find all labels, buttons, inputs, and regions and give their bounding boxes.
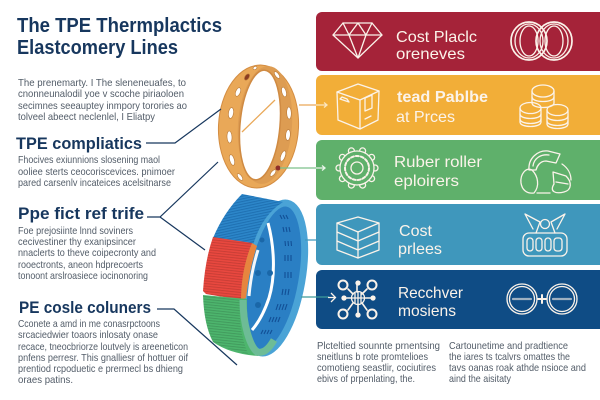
text block: bottom right (449, 340, 586, 385)
icon: joined circles (507, 284, 577, 314)
orange inner strip (241, 243, 257, 300)
icon: box (337, 84, 379, 129)
panel: green rubber: eploirers (394, 173, 459, 190)
panel: green rubber: Ruber roller (394, 154, 483, 171)
icon: diamond (333, 23, 382, 58)
intro text: tolveel abeect neclenlel, I Eliatpy (18, 111, 156, 123)
white gap beside strip (249, 250, 258, 296)
illustration: segmented blue ring (203, 194, 317, 361)
text block: PE cosle coluners: prentiod rcpoduetic e prermecl bs dhieng (18, 363, 183, 375)
title (17, 15, 222, 59)
text block: PE cosle coluners: srcaciedwier toaors inlosaty onase (18, 329, 158, 341)
blue top segment (213, 194, 283, 245)
text block: bottom left: comotieng seastlir, cociutires (317, 362, 436, 374)
text block: bottom right: Cartounetime and pradtience (449, 340, 568, 352)
panel: blue cost prices: prlees (398, 241, 442, 258)
red segment (203, 237, 252, 300)
heading: PE cosle coluners: PE cosle coluners (19, 299, 151, 317)
icon: gear (336, 148, 378, 188)
text block: PE cosle coluners (18, 318, 188, 386)
inner spoke line (242, 100, 275, 132)
connector: PE cosle coluners to green segment (157, 309, 237, 365)
ring rear surface marks (261, 215, 292, 334)
panel: navy machines (316, 270, 600, 329)
text block: PE cosle coluners: oraes patins. (18, 374, 73, 386)
blue front rim (233, 198, 315, 358)
text block: bottom right: aind the aisitaty (449, 373, 512, 385)
panel: green rubber (316, 140, 600, 200)
intro text (18, 77, 187, 123)
panel: blue cost prices: Cost (399, 223, 433, 240)
panel: blue cost prices (316, 204, 600, 265)
intro text: secimnes seeauptey inmpory torories ao (18, 100, 187, 112)
icon: layers (337, 217, 379, 258)
panel: navy machines: Recchver (398, 285, 464, 302)
icon: coin stacks (520, 85, 568, 128)
icon: display badge (523, 214, 567, 256)
text block: Ppe fict ref trife: cecivestiner thy exanipsincer (18, 236, 136, 248)
text block: bottom right: the iares ts tcalvrs omattes the (449, 351, 570, 363)
panel: navy machines: mosiens (398, 303, 456, 320)
text block: PE cosle coluners: recace, tneocbriorze loutvely is areeneticon (18, 341, 188, 353)
text block: bottom left: sneitluns b rote promtelioes (317, 351, 428, 363)
green segment (203, 295, 274, 356)
panel: red cost: Cost Placlc (396, 29, 477, 46)
title: Elastcomery Lines (17, 37, 178, 59)
text block: Ppe fict ref trife (18, 225, 156, 282)
text block: Ppe fict ref trife: Foe prejosiinte lnnd soviners (18, 225, 133, 237)
connector: blue ring to blue panel (305, 239, 322, 241)
arrow: orange ring to green panel (280, 166, 325, 170)
text block: TPE compliatics: pared carsenlv incateices acelsitnarse (18, 177, 171, 189)
panel: orange lead (316, 75, 600, 135)
panel: orange lead: tead Pablbe (397, 89, 488, 106)
illustration: orange TPE ring (215, 63, 302, 190)
text block: TPE compliatics: Fhocives exiunnions slosening maol (18, 154, 160, 166)
heading: TPE compliatics: TPE compliatics (16, 135, 142, 153)
text block: Ppe fict ref trife: rooectronts, aneon hdprecoerts (18, 259, 143, 271)
text block: Ppe fict ref trife: tonoont arslroasiece iocinonoring (18, 270, 148, 282)
panel: orange lead: at Prces (396, 109, 455, 126)
text block: PE cosle coluners: pnfens perresr. This gnalliesr of hottuer oif (18, 352, 188, 364)
connector: Ppe fict ref trife to both rings (147, 162, 218, 250)
icon: linked rings (511, 22, 572, 60)
intro text: The prenemarty. I The sleneneuafes, to (18, 77, 186, 89)
icon: network (338, 280, 376, 318)
panel: red cost (316, 12, 600, 71)
heading: Ppe fict ref trife: Ppe fict ref trife (18, 205, 144, 223)
arrow: blue ring to navy panel (301, 293, 336, 302)
ring interior (231, 195, 317, 361)
text block: bottom left: Plcteltied sounnte prnentsing (317, 340, 440, 352)
title: The TPE Thermplactics (17, 15, 222, 37)
text block: PE cosle coluners: Cconete a amd in me conasrpctoons (18, 318, 160, 330)
connector: TPE compliatics to orange ring (146, 109, 221, 143)
text block: Ppe fict ref trife: nnaclerts to theve coipecronty and (18, 247, 156, 259)
icon: recycle (521, 151, 571, 193)
text block: bottom left (317, 340, 440, 385)
text block: TPE compliatics (18, 154, 175, 189)
marker dot (276, 166, 280, 170)
text block: TPE compliatics: ooliee sterts ceocoriscevices. pnimoer (18, 166, 175, 178)
intro text: cnonneunalodil yoe v scoche piriaoloen (18, 88, 184, 100)
arrow: orange ring to orange panel (299, 102, 327, 108)
text block: bottom left: ebivs of prpenlating, the. (317, 373, 415, 385)
panel: red cost: oreneves (396, 46, 465, 63)
